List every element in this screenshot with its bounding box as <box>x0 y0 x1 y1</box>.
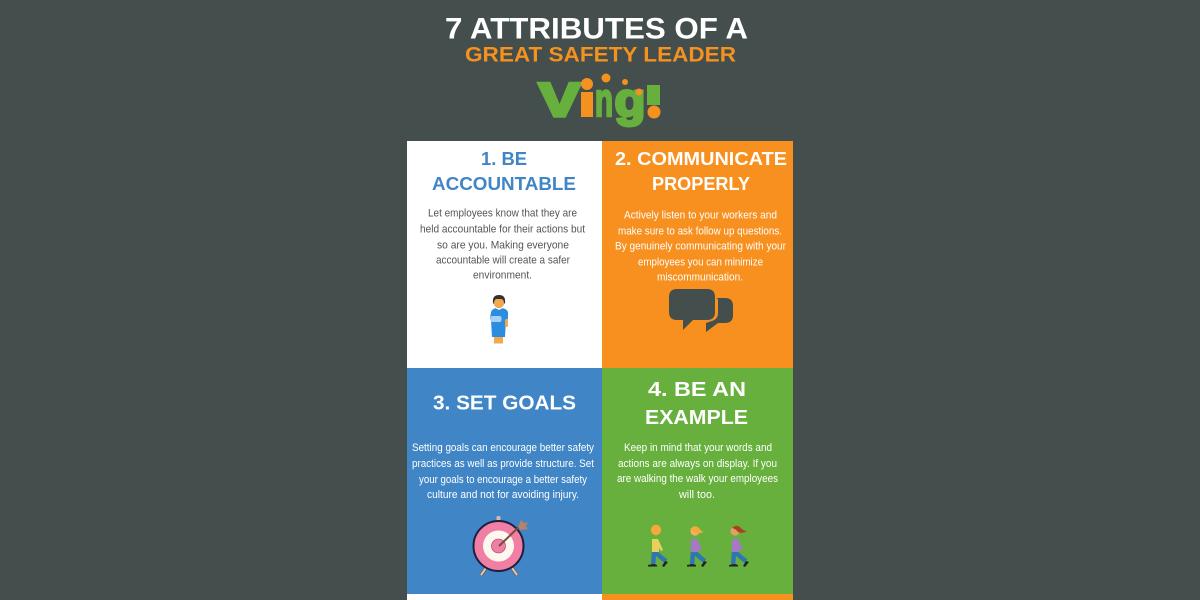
text: set goals: your goals to encourage a better safety <box>419 474 587 486</box>
text: be accountable: accountable will create a safer <box>436 254 570 266</box>
text: be an example: Keep in mind that your words and <box>624 442 772 454</box>
panel: next row white <box>407 594 602 600</box>
panel: set goals <box>407 368 602 594</box>
text: communicate properly <box>615 210 786 284</box>
text: communicate properly: miscommunication. <box>657 272 743 284</box>
text: be an example: are walking the walk your employees <box>617 473 778 485</box>
text: be accountable: held accountable for their actions but <box>420 224 585 236</box>
icon: speech bubbles <box>669 289 733 332</box>
heading: communicate properly: 2. COMMUNICATE <box>615 148 787 169</box>
text: be an example: actions are always on display. If you <box>618 458 777 470</box>
text: communicate properly: make sure to ask follow up questions. <box>618 226 782 238</box>
text: be an example: will too. <box>678 489 715 501</box>
text: be accountable: environment. <box>473 270 532 282</box>
icon: walker 3 <box>729 526 749 567</box>
text: be accountable <box>420 208 585 282</box>
icon: person <box>490 295 508 344</box>
heading: communicate properly <box>615 148 787 194</box>
icon: walker 1 <box>648 525 668 567</box>
icon: walker 2 <box>687 526 707 567</box>
heading: be an example <box>645 379 748 429</box>
panel: communicate properly <box>602 141 793 368</box>
logo: Ving!: g <box>614 73 646 126</box>
logo: Ving!: n <box>595 73 613 126</box>
heading: set goals: 3. SET GOALS <box>433 392 576 414</box>
panel: next row orange <box>602 594 793 600</box>
heading: communicate properly: PROPERLY <box>652 173 751 194</box>
heading: be accountable: ACCOUNTABLE <box>432 173 576 194</box>
text: set goals: culture and not for avoiding injury. <box>427 489 579 501</box>
logo: Ving! <box>539 73 660 126</box>
text: set goals <box>412 442 594 501</box>
heading: be accountable: 1. BE <box>481 148 527 169</box>
title: 7 ATTRIBUTES OF A <box>445 12 748 46</box>
text: communicate properly: employees you can minimize <box>638 256 763 268</box>
heading: be an example: EXAMPLE <box>645 407 748 429</box>
title: GREAT SAFETY LEADER <box>465 42 736 66</box>
logo: Ving!: V <box>539 73 581 126</box>
heading: be an example: 4. BE AN <box>648 379 746 401</box>
text: be accountable: Let employees know that they are <box>428 208 577 220</box>
heading: be accountable <box>432 148 576 194</box>
text: set goals: practices as well as provide structure. Set <box>412 458 594 470</box>
icon: target with arrow <box>474 516 528 575</box>
text: communicate properly: By genuinely communicating with your <box>615 240 786 252</box>
title <box>445 12 748 66</box>
text: set goals: Setting goals can encourage better safety <box>412 442 594 454</box>
text: be accountable: so are you. Making everyone <box>437 240 569 252</box>
text: communicate properly: Actively listen to your workers and <box>624 210 777 222</box>
panel: be an example <box>602 368 793 594</box>
text: be an example <box>617 442 778 501</box>
panel: be accountable <box>407 141 602 368</box>
